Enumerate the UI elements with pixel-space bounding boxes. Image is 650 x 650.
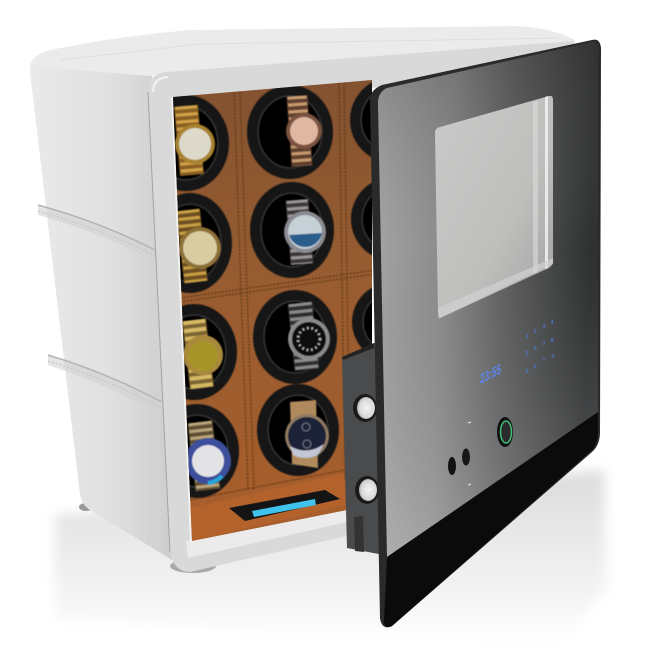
control display panel (229, 490, 340, 521)
stitching (180, 80, 375, 500)
keypad digits: 7 (542, 341, 546, 347)
keypad digits (525, 320, 555, 375)
feet (79, 503, 216, 573)
watches (175, 96, 330, 490)
key holes (448, 422, 471, 485)
watch row 3 left yellow (183, 320, 223, 388)
cabinet top (30, 26, 576, 76)
watch row 2 middle blue (284, 200, 326, 264)
keypad digits: 2 (533, 329, 537, 335)
watch row 4 middle navy (285, 400, 329, 468)
watch row 2 left gold (179, 210, 221, 282)
window (435, 96, 553, 318)
fingerprint ring (497, 417, 513, 447)
interior: leather panels and winders (173, 80, 372, 541)
front frame (148, 41, 578, 572)
watch row 3 middle black (288, 303, 330, 370)
lock bolts (353, 394, 379, 504)
door lock block (342, 343, 384, 555)
keypad digits: 6 (533, 346, 537, 352)
cabinet left side (30, 54, 172, 560)
keypad digits: # (551, 354, 555, 360)
keypad digits: 1 (525, 334, 529, 340)
latch slot (354, 516, 364, 552)
blue time display: 23:55 (480, 362, 501, 388)
leather back wall (170, 75, 375, 545)
keypad digits: 8 (550, 338, 554, 344)
watch row 4 left blue bezel (185, 422, 231, 490)
watch row 1 middle rose (286, 96, 322, 166)
floor of interior (190, 473, 345, 541)
floor reflection (55, 470, 606, 645)
keypad digits: 4 (550, 320, 554, 326)
keypad digits: 9 (525, 369, 529, 375)
keypad digits: 3 (542, 324, 546, 330)
watch row 1 left gold (175, 106, 215, 175)
keypad digits: 0 (533, 364, 537, 370)
keypad digits: 5 (525, 351, 529, 357)
door face (378, 42, 598, 557)
winder rings (173, 82, 372, 499)
keypad digits: * (543, 358, 546, 364)
glass door (370, 40, 601, 627)
black lower band (384, 412, 598, 627)
